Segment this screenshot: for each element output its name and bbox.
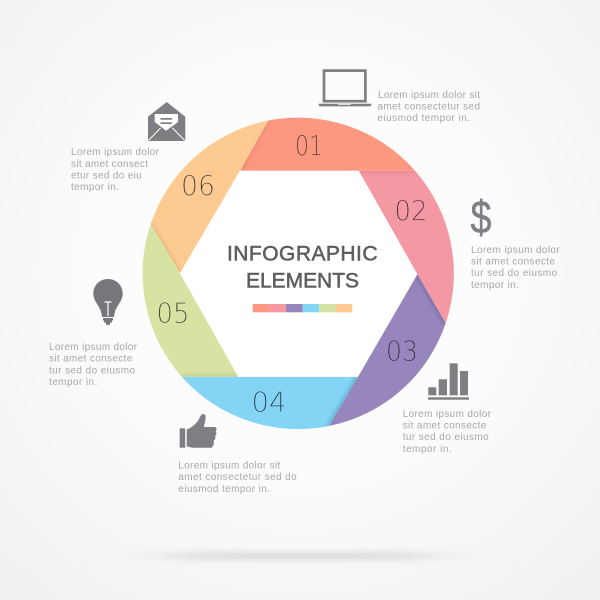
title	[227, 243, 378, 293]
text: block 02: sit amet consecte	[471, 256, 555, 268]
icon: bar chart	[428, 363, 469, 400]
text: block 01: eiusmod tempor in.	[378, 113, 470, 124]
text: block 01	[378, 90, 480, 124]
text: block 05	[49, 342, 138, 388]
segment 01	[240, 118, 415, 171]
text: block 06: sit amet consect	[71, 159, 148, 170]
segment 02	[359, 171, 454, 323]
segment 04: 04	[252, 386, 286, 418]
text: block 02: tur sed do eiusmo	[471, 268, 557, 279]
text: block 06	[71, 147, 160, 193]
text: block 03	[403, 409, 492, 455]
icon: open envelope	[148, 102, 185, 141]
icon: dollar sign: $	[470, 191, 492, 243]
title: INFOGRAPHIC	[227, 243, 378, 266]
text: block 01: amet consectetur sed	[378, 102, 480, 112]
icon: light bulb	[93, 279, 123, 325]
text: block 03: sit amet consecte	[403, 420, 487, 432]
hexagon ring chart	[143, 118, 454, 429]
icon: thumbs up	[180, 414, 217, 448]
text: block 06: etur sed do eiu	[71, 170, 142, 182]
ground shadow	[170, 552, 430, 560]
text: block 02	[471, 245, 560, 291]
title: ELEMENTS	[246, 270, 359, 293]
text: block 03: tempor in.	[403, 444, 452, 455]
segment 02: 02	[394, 194, 428, 227]
colour legend bar	[253, 304, 352, 312]
text: block 04: eiusmod tempor in.	[178, 484, 270, 495]
icon: laptop	[318, 71, 372, 106]
segment 03	[329, 274, 446, 426]
text: block 02: Lorem ipsum dolor	[471, 245, 560, 256]
text: block 01: Lorem ipsum dolor sit	[378, 90, 480, 101]
text: block 06: Lorem ipsum dolor	[71, 147, 160, 158]
segment 06	[151, 120, 268, 273]
text: block 02: tempor in.	[471, 280, 519, 291]
text: block 03: Lorem ipsum dolor	[403, 409, 492, 420]
segment 04	[182, 377, 358, 429]
text: block 06: tempor in.	[71, 182, 119, 193]
text: block 05: Lorem ipsum dolor	[49, 342, 138, 353]
segment 01: 01	[295, 129, 323, 162]
segment 06: 06	[181, 169, 215, 202]
text: block 05: tempor in.	[49, 377, 97, 388]
text: block 04	[178, 460, 297, 495]
center hexagon	[180, 171, 417, 377]
text: block 03: tur sed do eiusmo	[403, 432, 489, 443]
text: block 05: tur sed do eiusmo	[49, 365, 135, 376]
segment 05: 05	[156, 296, 190, 330]
segment 03: 03	[386, 334, 418, 368]
text: block 04: amet consectetur sed do	[178, 472, 297, 483]
segment 05	[143, 224, 238, 377]
text: block 05: sit amet consecte	[49, 354, 133, 365]
text: block 04: Lorem ipsum dolor sit	[178, 460, 281, 472]
